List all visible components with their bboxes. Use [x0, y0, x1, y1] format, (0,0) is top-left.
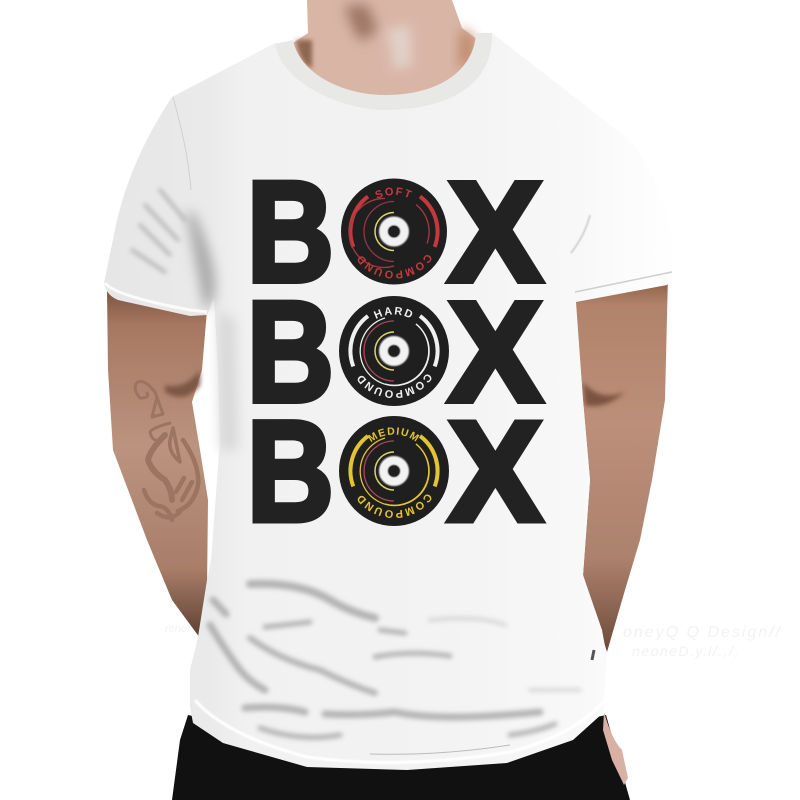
watermark text: rene: [165, 623, 187, 635]
black trousers: [172, 715, 630, 800]
tyre icon: medium compound: [339, 416, 449, 526]
neck: [290, 0, 480, 105]
watermark text: [165, 623, 782, 659]
letter X: X: [449, 392, 542, 550]
tyre icon: hard compound: HARD: [374, 306, 412, 319]
tyre icon: medium compound: COMPOUND: [358, 494, 432, 518]
tyre icon: soft compound: [341, 178, 447, 284]
letter B: B: [247, 391, 334, 551]
tyre icon: soft compound: SOFT: [375, 187, 412, 198]
letter X: X: [449, 273, 542, 431]
right arm: [575, 275, 668, 652]
tyre icon: hard compound: COMPOUND: [358, 374, 432, 398]
left arm: [107, 290, 208, 638]
waist wrinkles: [210, 584, 580, 737]
right hand: [603, 712, 628, 785]
tyre icon: soft compound: COMPOUND: [358, 255, 432, 278]
white t-shirt body and sleeves: [104, 33, 678, 770]
letter X: X: [449, 153, 542, 311]
tyre icon: medium compound: MEDIUM: [368, 427, 420, 442]
watermark text: neoneD.y.l/.,/,: [632, 643, 740, 659]
print: second row BOX hard compound: [247, 271, 547, 431]
watermark text: oneyQ Q Design//: [623, 624, 782, 641]
tyre icon: hard compound: [339, 296, 449, 406]
print: first row BOX soft compound: [247, 151, 547, 311]
collar: [275, 33, 492, 110]
letter B: B: [247, 271, 334, 431]
letter B: B: [247, 151, 334, 311]
sleeve seam and shadows: [173, 97, 191, 190]
print: third row BOX medium compound: [247, 391, 547, 551]
tattoo: [135, 381, 198, 520]
